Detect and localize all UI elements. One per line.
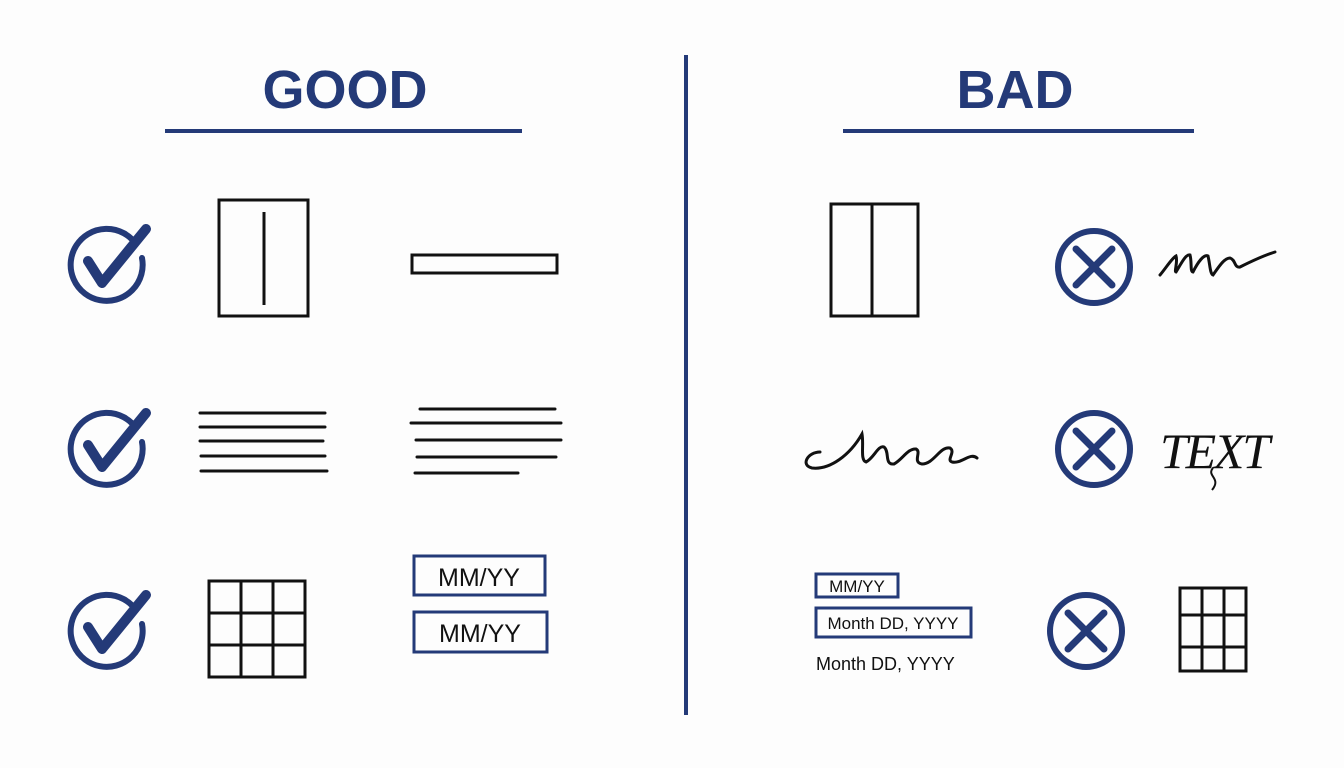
date fields inconsistent: Month DD, YYYY	[816, 654, 955, 674]
panel: bad	[806, 204, 1275, 674]
date fields inconsistent	[816, 574, 971, 674]
panel: good	[71, 200, 561, 677]
icon: two column form	[831, 204, 918, 316]
icon: small grid	[1180, 588, 1246, 671]
date fields inconsistent: Month DD, YYYY	[827, 614, 959, 633]
date fields: MM/YY	[438, 564, 520, 592]
icon: input field	[412, 255, 557, 273]
icon: grid	[209, 581, 305, 677]
title: BAD	[843, 60, 1194, 133]
icon: x 1	[1058, 231, 1130, 303]
icon: cursive scribble	[806, 434, 977, 468]
divider	[684, 55, 688, 715]
icon: text lines	[411, 409, 561, 473]
date fields	[414, 556, 547, 652]
icon: x 2	[1058, 413, 1130, 485]
icon: check 3	[71, 595, 146, 667]
text: decorative TEXT: TEXT	[1160, 423, 1273, 479]
icon: x 3	[1050, 595, 1122, 667]
icon: scribble	[1160, 252, 1275, 275]
icon: single column form	[219, 200, 308, 316]
date fields: MM/YY	[439, 620, 521, 648]
icon: aligned lines	[200, 413, 327, 471]
title: GOOD: GOOD	[262, 60, 428, 120]
icon: check 2	[71, 413, 146, 485]
title: GOOD	[165, 60, 522, 133]
date fields inconsistent: MM/YY	[829, 577, 885, 596]
icon: check 1	[71, 229, 146, 301]
title: BAD: BAD	[956, 60, 1074, 120]
